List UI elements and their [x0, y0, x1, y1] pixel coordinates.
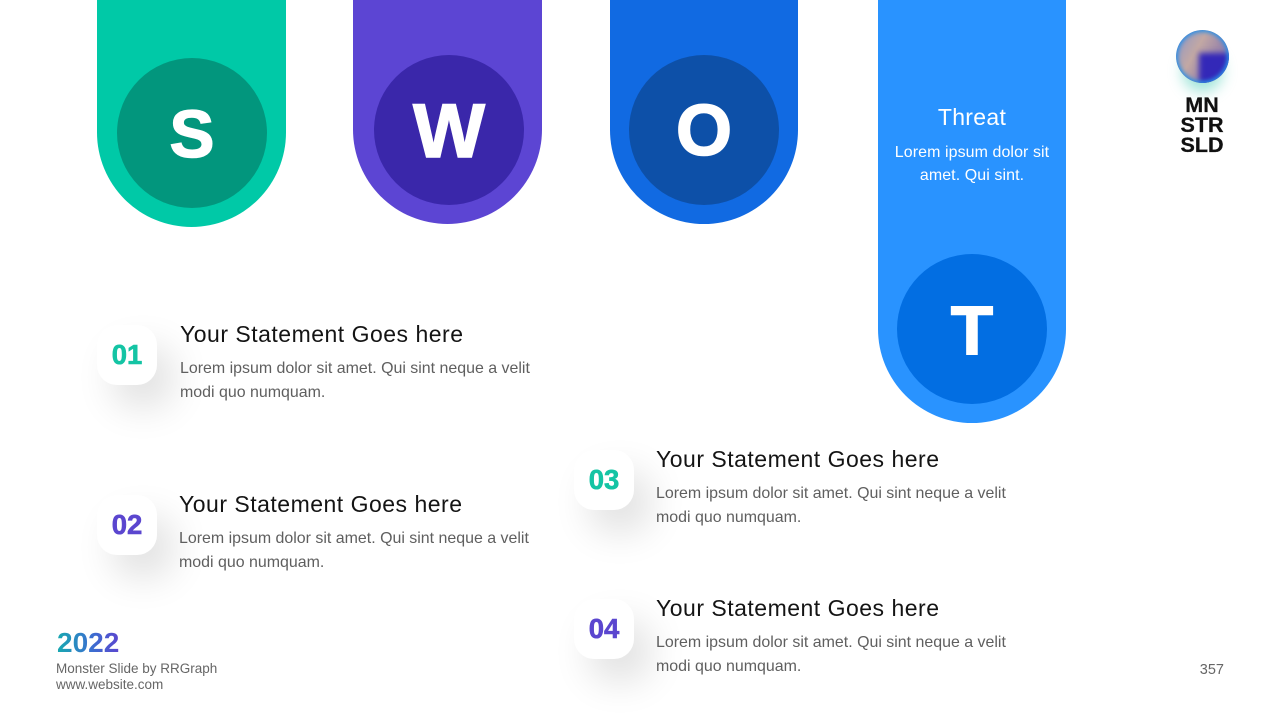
panel text: amet. Qui sint.	[920, 167, 1024, 184]
panel text	[895, 144, 1049, 184]
icon: gradient sphere	[1176, 30, 1229, 83]
footer: year and credits	[56, 627, 217, 692]
letter circle: S: S	[170, 97, 214, 172]
heading: Your Statement Goes here	[179, 491, 462, 517]
logo text: SLD	[1180, 133, 1224, 157]
letter circle: O	[629, 55, 779, 205]
sphere rim	[1176, 30, 1229, 83]
panel: W weakness	[353, 0, 542, 224]
statement text	[656, 595, 1006, 675]
heading: Your Statement Goes here	[656, 446, 940, 472]
statement text	[179, 491, 529, 571]
body text: Lorem ipsum dolor sit amet. Qui sint neque a velit modi quo numquam.	[656, 634, 1006, 675]
logo text: MN	[1185, 93, 1219, 117]
heading: Your Statement Goes here	[180, 321, 464, 347]
logo text	[1180, 93, 1224, 157]
letter circle: T: T	[951, 292, 993, 369]
page number: 357	[1200, 662, 1224, 678]
number tile 04: 04	[589, 613, 619, 644]
credits: www.website.com	[56, 677, 163, 692]
letter circle: S	[117, 58, 267, 208]
icon: sphere glow	[1182, 50, 1223, 92]
statement 03	[583, 446, 1006, 540]
letter circle: W	[374, 55, 524, 205]
number tile 03	[574, 450, 634, 510]
heading: Your Statement Goes here	[656, 595, 940, 621]
body text: Lorem ipsum dolor sit amet. Qui sint neque a velit modi quo numquam.	[180, 360, 530, 401]
panel: T threat	[878, 0, 1066, 423]
logo	[1174, 30, 1231, 157]
number tile 04	[574, 599, 634, 659]
number tile 02: 02	[112, 509, 142, 540]
body text: Lorem ipsum dolor sit amet. Qui sint neque a velit modi quo numquam.	[179, 530, 529, 571]
number tile 03: 03	[589, 464, 619, 495]
statement 02	[106, 491, 529, 584]
panel text: Lorem ipsum dolor sit	[895, 144, 1049, 161]
panel heading: Threat: Threat	[938, 104, 1006, 130]
letter circle: O: O	[676, 91, 732, 171]
panel: O opportunity	[610, 0, 798, 224]
statement 04	[583, 595, 1006, 688]
credits: Monster Slide by RRGraph	[56, 661, 217, 676]
number tile 02	[97, 495, 157, 555]
sphere dark blue core	[1199, 53, 1239, 93]
statement 01	[106, 321, 530, 414]
statement text	[656, 446, 1006, 526]
panel: S strength	[97, 0, 286, 227]
number tile 01	[97, 325, 157, 385]
logo text: STR	[1180, 113, 1224, 137]
letter circle: T	[897, 254, 1047, 404]
letter circle: W: W	[413, 89, 485, 174]
number tile 01: 01	[112, 339, 142, 370]
body text: Lorem ipsum dolor sit amet. Qui sint neque a velit modi quo numquam.	[656, 485, 1006, 526]
credits	[56, 661, 217, 692]
statement text	[180, 321, 530, 401]
year: 2022	[57, 627, 119, 658]
